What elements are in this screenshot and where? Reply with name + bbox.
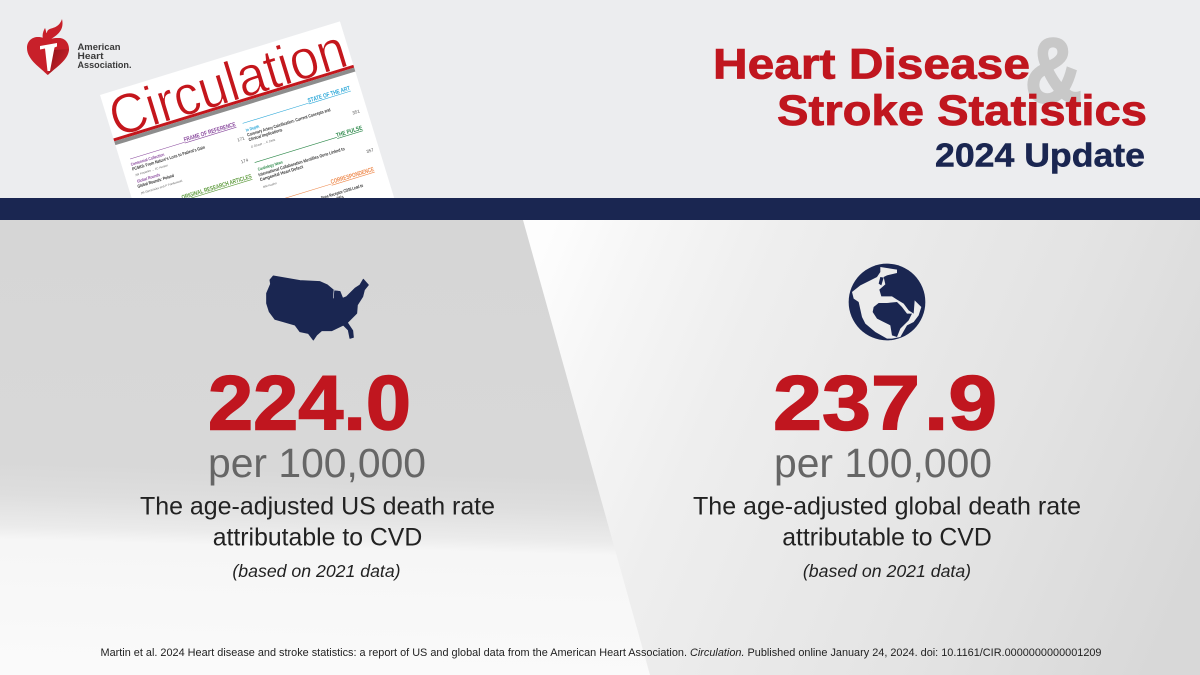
contents: left column: ORIGINAL RESEARCH ARTICLES (181, 173, 253, 201)
contents: left column: PCSK9: From Nature's Loss to Patient's Gain (131, 145, 206, 172)
contents: left column: JM Gierzinska and P Ponikowski (140, 179, 183, 195)
contents: right column: STATE OF THE ART (307, 85, 351, 105)
contents: right column: In Depth (245, 124, 260, 133)
contents: right column: CORRESPONDENCE (330, 166, 375, 186)
contents: left column (130, 122, 252, 198)
contents: right column: BM Kuehn (263, 181, 278, 189)
data note: (based on 2021 data) (803, 561, 971, 581)
logo wordmark: American (78, 42, 121, 53)
contents: left column: 174 (240, 157, 249, 164)
panel: US statistic (140, 276, 495, 581)
navy divider band (0, 198, 1200, 220)
contents: left column: FRAME OF REFERENCE (183, 121, 237, 144)
contents: right column: Coronary Artery Calcification: Current Concepts and (247, 107, 331, 137)
contents: right column: Cardiology News (257, 159, 284, 172)
contents: right column (242, 86, 375, 198)
contents: right column: Congenital Heart Defect (259, 164, 304, 182)
description line 2: attributable to CVD (782, 524, 992, 552)
contents: right column: THE PULSE (335, 125, 363, 139)
contents: right column: O Dzaye ... C Zeitz (250, 137, 276, 149)
description line 2: attributable to CVD (213, 524, 422, 552)
description: The age-adjusted global death rate (693, 494, 1081, 520)
panel: right global background (0, 220, 1200, 675)
contents: left column: 171 (237, 135, 246, 143)
contents: right column: Myocarditis (322, 194, 345, 205)
panel: global statistic (693, 264, 1081, 581)
logo wordmark: Association. (78, 60, 132, 71)
contents: left column: Global Rounds (136, 172, 161, 184)
ampersand: & (1025, 20, 1082, 122)
icon: heart and torch (27, 19, 69, 75)
description: The age-adjusted US death rate (140, 494, 495, 520)
journal cover: Circulation (100, 22, 394, 198)
title line 1: Heart Disease (713, 40, 1030, 88)
unit: per 100,000 (774, 440, 992, 486)
unit: per 100,000 (208, 440, 426, 486)
title block (713, 20, 1147, 174)
title line 2: Stroke Statistics (777, 87, 1147, 135)
contents: left column: Centennial Collection (130, 152, 165, 167)
statistic value: .9 (924, 360, 997, 446)
subtitle: 2024 Update (935, 136, 1145, 174)
contents: right column: International Collaboration Identifies Gene Linked to (258, 146, 345, 177)
contents: right column: Does Receptor CD36 Lead to (320, 183, 364, 201)
panel: left US background (0, 220, 650, 675)
icon: US map (267, 276, 368, 340)
masthead rule (113, 65, 355, 145)
statistic value: 237 (773, 360, 920, 446)
contents: left column: JW Knowles ... JC Horton (135, 163, 169, 177)
logo wordmark (78, 42, 132, 71)
contents: right column: 357 (366, 147, 375, 154)
logo wordmark: Heart (78, 51, 104, 62)
contents: right column: 351 (352, 108, 361, 116)
logo: American Heart Association (27, 19, 132, 75)
footer citation: Martin et al. 2024 Heart disease and stroke statistics: a report of US and global data from the American Heart Association. Circulation. Published online January 24, 2024. doi: 10.1161/CIR.0000000000001209 (100, 647, 1102, 659)
contents: right column: Clinical Implications (248, 127, 283, 142)
icon: globe (849, 264, 925, 340)
statistic value: 224.0 (208, 360, 411, 446)
journal masthead: Circulation (101, 16, 354, 149)
data note: (based on 2021 data) (232, 561, 401, 581)
contents: left column: Global Rounds: Poland (137, 173, 175, 189)
